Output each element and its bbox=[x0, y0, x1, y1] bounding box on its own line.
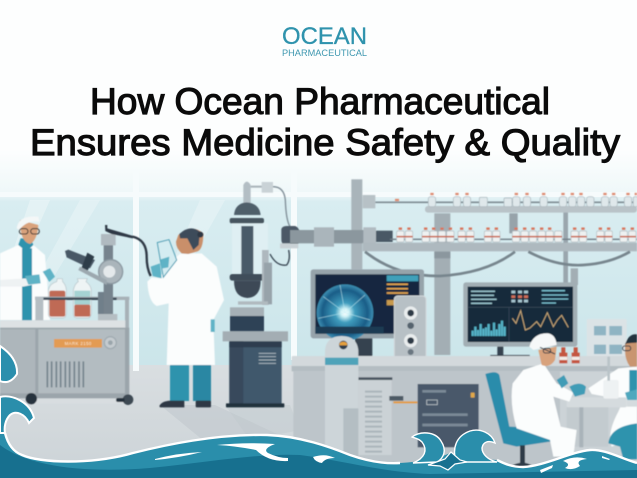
lab equipment cart bbox=[0, 320, 133, 405]
row of medicine vials upper bbox=[428, 197, 637, 207]
deep water band bbox=[0, 445, 637, 478]
scientist viewed from behind holding tablet bbox=[147, 228, 224, 407]
curling wave at left bbox=[0, 396, 34, 433]
analyzer machine bbox=[325, 336, 358, 465]
main wave body bbox=[0, 433, 637, 478]
upper vial caps bbox=[395, 194, 637, 200]
scientist at left bench bbox=[0, 216, 55, 320]
title: Ensures Medicine Safety & Quality bbox=[30, 122, 621, 163]
upper side wave bbox=[0, 346, 17, 382]
title: How Ocean Pharmaceutical bbox=[90, 81, 550, 122]
foam marks bbox=[155, 443, 610, 473]
reagent bottles bbox=[48, 279, 91, 318]
right lab scene bbox=[290, 179, 637, 467]
reactor vessel bbox=[223, 182, 300, 407]
control panel bbox=[394, 296, 426, 361]
red medicine bottles bbox=[559, 347, 580, 363]
logo: OCEAN bbox=[282, 23, 367, 50]
right monitor with charts bbox=[463, 282, 577, 360]
left lab scene bbox=[0, 182, 300, 407]
lab equipment cart: MARK 2150 bbox=[65, 341, 92, 346]
wave crest outline bbox=[5, 433, 637, 467]
title bbox=[30, 81, 621, 163]
left crest bbox=[412, 433, 444, 463]
left monitor with cell image bbox=[311, 269, 424, 361]
seated scientist on blue chair bbox=[485, 333, 586, 467]
logo: PHARMACEUTICAL bbox=[282, 48, 367, 59]
pipeline frame and conveyor bbox=[290, 179, 637, 355]
ocean wave footer bbox=[0, 346, 637, 478]
wall sample chart panel bbox=[587, 319, 627, 358]
lab table with flask bbox=[567, 357, 637, 447]
second seated scientist at right bbox=[588, 334, 637, 459]
row of medicine vials lower bbox=[397, 229, 636, 242]
microscope bbox=[35, 225, 151, 328]
right crest bbox=[455, 430, 497, 462]
lab bench bbox=[292, 356, 637, 465]
middle peak bbox=[428, 452, 467, 470]
